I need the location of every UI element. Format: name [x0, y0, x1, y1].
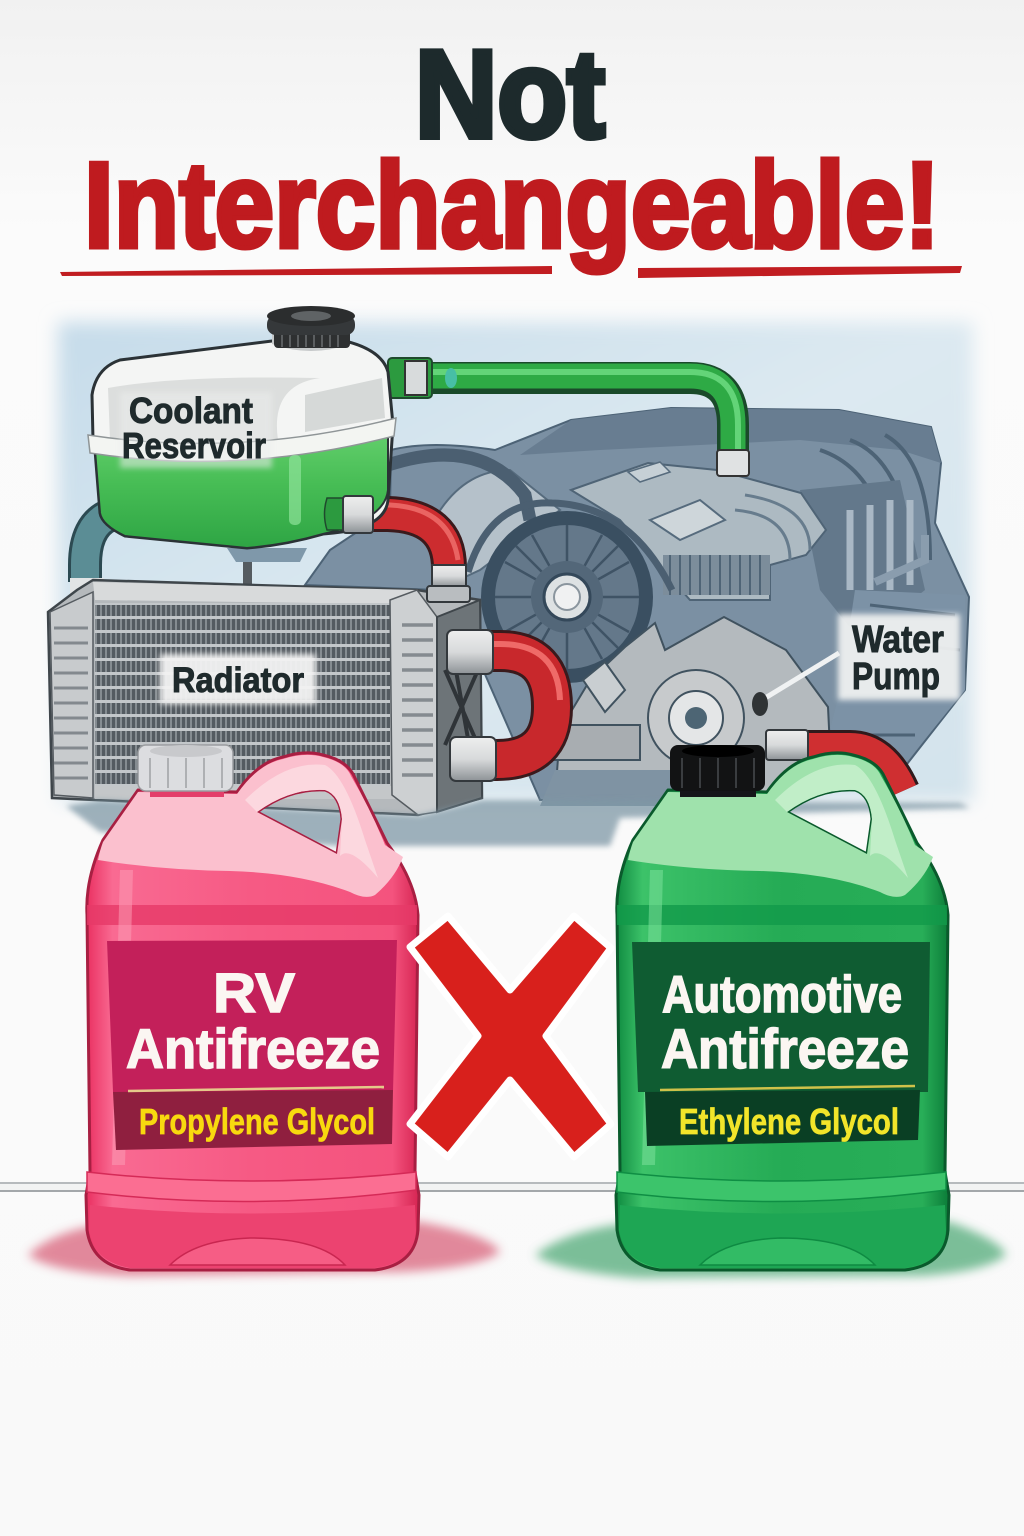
puddle: green [535, 1222, 1006, 1278]
jug label: Automotive [662, 966, 902, 1024]
jug body [616, 753, 949, 1270]
floor line [0, 1182, 1024, 1192]
engine pulley [481, 511, 653, 683]
jug cap [670, 745, 765, 797]
panel: engine illustration backdrop [58, 322, 973, 802]
puddle: pink [28, 1222, 500, 1276]
green outlet stub [324, 498, 345, 530]
jug cap [138, 745, 233, 797]
title: Not [415, 26, 605, 164]
jug shoulder [98, 755, 403, 897]
radiator label: Radiator [172, 661, 304, 700]
jug label [632, 942, 930, 1146]
jug label: Propylene Glycol [139, 1101, 375, 1142]
title [60, 26, 962, 278]
pipe: red upper hose [365, 505, 470, 602]
pipe: pump to green jug [766, 730, 905, 790]
engine dark hose [388, 455, 530, 520]
water pump label [838, 614, 960, 700]
engine drum [437, 470, 560, 590]
jug label [107, 940, 397, 1150]
jug label: Antifreeze [661, 1017, 909, 1080]
reservoir label: Coolant [129, 390, 253, 431]
water pump label: Water [852, 619, 944, 661]
jug label: Antifreeze [126, 1017, 380, 1080]
icon: reservoir cap [267, 306, 355, 351]
pipe: green top hose [388, 358, 749, 476]
pipe: red lower loop [447, 630, 560, 781]
reservoir label: Reservoir [122, 425, 266, 466]
jug label: Ethylene Glycol [679, 1101, 899, 1142]
engine light housing [571, 463, 826, 600]
engine [305, 408, 969, 800]
jug: automotive antifreeze [616, 745, 949, 1270]
ground shadow under engine [66, 800, 970, 846]
icon: red X [410, 916, 611, 1157]
radiator [48, 580, 482, 815]
jug body [86, 753, 419, 1270]
pipe: left loop behind reservoir [70, 515, 307, 596]
water pump label: Pump [852, 656, 940, 698]
water pump [540, 617, 839, 806]
jug: RV antifreeze [86, 745, 419, 1270]
coolant reservoir [88, 306, 396, 548]
reservoir label [120, 390, 272, 468]
jug shoulder [628, 755, 933, 897]
jug label: RV [213, 961, 295, 1024]
